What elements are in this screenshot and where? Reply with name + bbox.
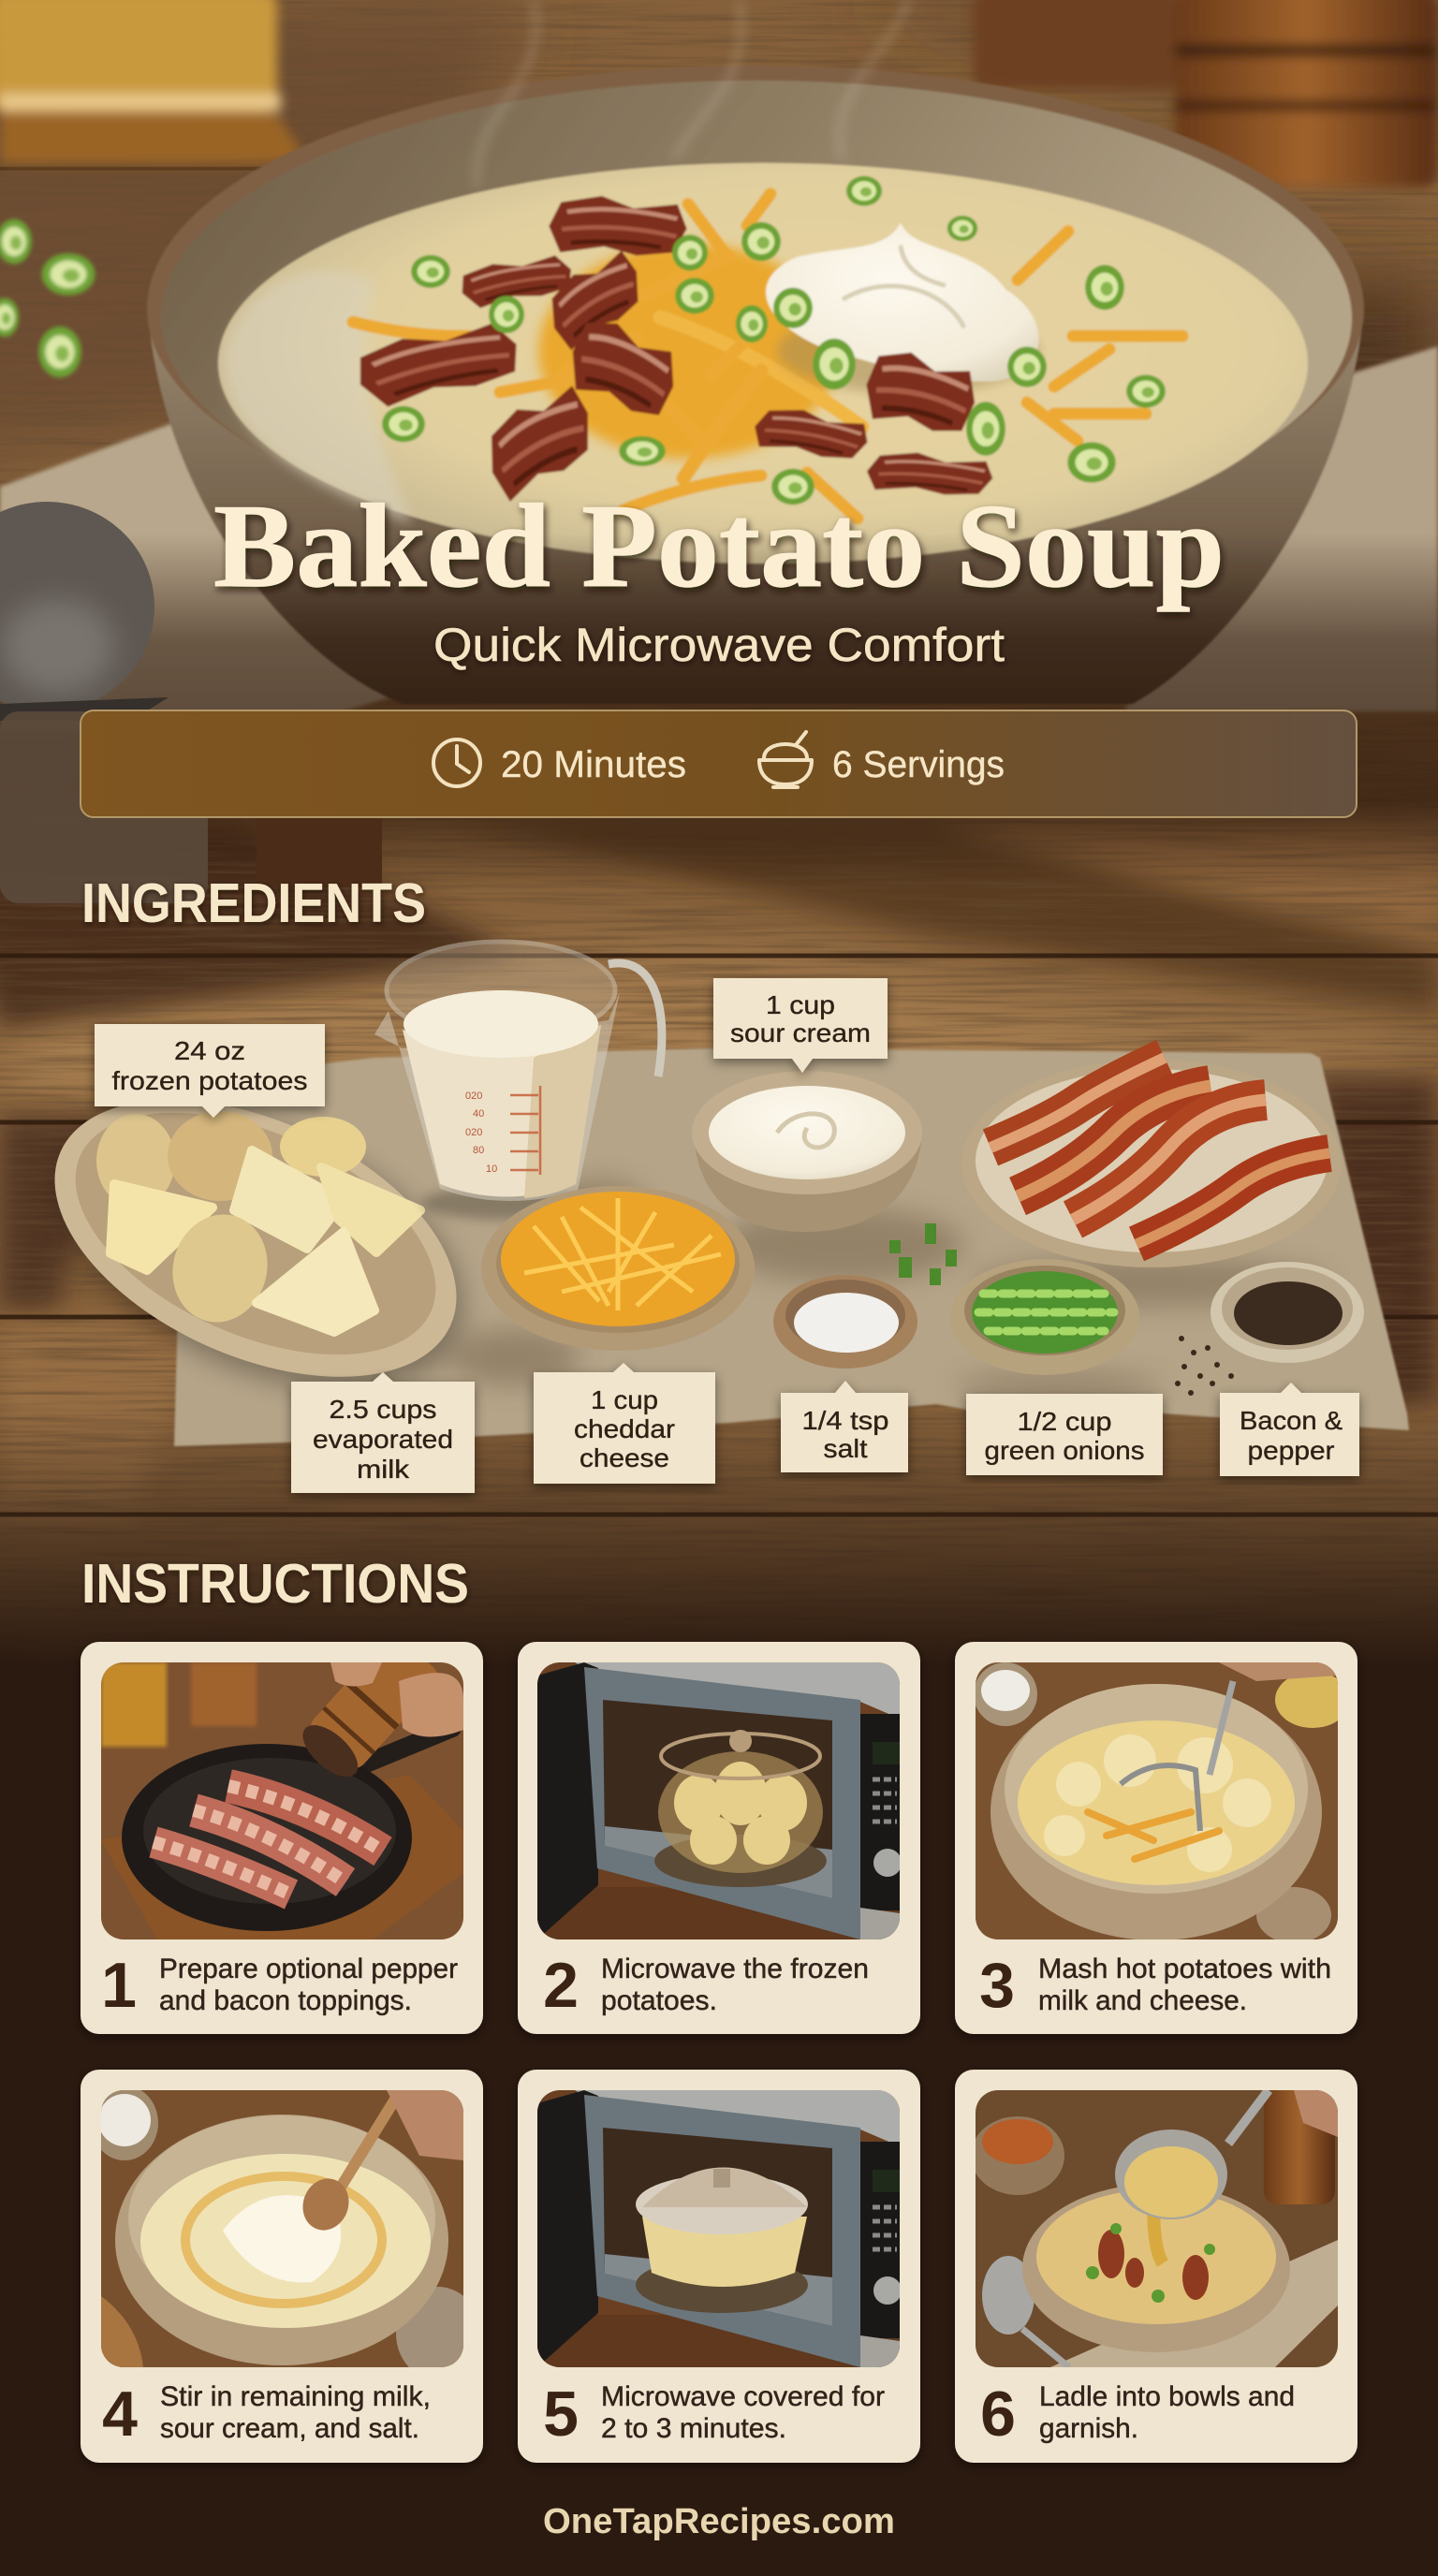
step card 3 xyxy=(955,1642,1357,2034)
step text 4 xyxy=(160,2381,431,2444)
step text 1: Prepare optional pepper xyxy=(159,1954,458,1984)
label: cheddar cheese: 1 cup xyxy=(591,1385,658,1414)
step text 3 xyxy=(1038,1954,1331,2016)
bowl inner wall xyxy=(161,80,1352,556)
ingredient: cheddar plate xyxy=(481,1186,755,1351)
step 6 image: ladling soup xyxy=(971,2090,1338,2367)
label: cheddar cheese xyxy=(534,1363,715,1484)
step text 2 xyxy=(601,1954,869,2016)
step text 5: 2 to 3 minutes. xyxy=(601,2413,786,2444)
label: frozen potatoes: frozen potatoes xyxy=(112,1066,307,1095)
linen cloth xyxy=(174,1048,1409,1446)
hero props: blurred glass and pepper mills xyxy=(0,0,1437,187)
bacon pieces xyxy=(347,191,998,506)
label: evaporated milk: 2.5 cups xyxy=(330,1395,436,1424)
ingredient: bacon plate xyxy=(961,1058,1342,1267)
label: cheddar cheese: cheese xyxy=(580,1443,669,1472)
title: Baked Potato Soup xyxy=(213,479,1225,612)
step text 2: potatoes. xyxy=(601,1985,717,2016)
step number 5: 5 xyxy=(543,2378,579,2450)
label: evaporated milk: milk xyxy=(357,1455,410,1484)
step card 2 xyxy=(518,1642,920,2034)
hero soup bowl xyxy=(147,66,1364,704)
step text 5: Microwave covered for xyxy=(601,2381,885,2412)
bowl rim xyxy=(147,66,1364,552)
label: salt xyxy=(781,1381,908,1472)
step text 2: Microwave the frozen xyxy=(601,1954,869,1984)
cheese mound xyxy=(538,243,838,459)
label: frozen potatoes xyxy=(95,1024,325,1118)
darkening overlay behind title xyxy=(0,534,1438,889)
servings: 6 Servings xyxy=(832,744,1005,785)
step 5 image: covered dish in microwave xyxy=(537,2090,902,2367)
step text 5 xyxy=(601,2381,885,2444)
step number 4: 4 xyxy=(102,2378,138,2450)
ingredient: salt bowl xyxy=(773,1275,917,1368)
label: evaporated milk xyxy=(291,1372,475,1493)
step number 1: 1 xyxy=(101,1950,137,2021)
hero props: linen napkin xyxy=(0,346,1438,730)
soup surface xyxy=(218,163,1308,564)
step number 2: 2 xyxy=(543,1950,579,2021)
ingredient: evaporated milk measuring cup xyxy=(374,942,662,1220)
step text 6 xyxy=(1039,2381,1295,2444)
ingredient: evaporated milk measuring cup: 80 xyxy=(473,1145,484,1156)
sour cream dollop xyxy=(766,223,1039,382)
label: bacon and pepper xyxy=(1220,1383,1359,1476)
cloth shadows xyxy=(449,1179,1329,1398)
background: rustic wood table fading to dark brown xyxy=(0,0,1438,1642)
label: salt: salt xyxy=(824,1434,868,1463)
loose onion pieces and peppercorns xyxy=(889,1223,1234,1396)
step card 1 xyxy=(81,1631,483,2034)
step number 3: 3 xyxy=(979,1950,1015,2021)
step card 5 xyxy=(518,2070,920,2463)
ingredient: evaporated milk measuring cup: 020 xyxy=(465,1127,482,1138)
heading: ingredients: INGREDIENTS xyxy=(81,872,426,934)
label: evaporated milk: evaporated xyxy=(313,1425,453,1454)
step text 1: and bacon toppings. xyxy=(159,1985,412,2016)
spoon and side props xyxy=(0,502,382,903)
icon: clock xyxy=(433,739,480,786)
label: sour cream xyxy=(713,978,888,1073)
label: cheddar cheese: cheddar xyxy=(574,1414,675,1443)
ingredient: sour cream bowl xyxy=(692,1071,922,1232)
table onion pieces xyxy=(0,219,95,377)
step card 4 xyxy=(81,2070,483,2463)
icon: bowl xyxy=(759,732,812,787)
ingredient: green onion bowl xyxy=(950,1259,1139,1375)
step 3 image: mashing potatoes xyxy=(974,1662,1350,1943)
step card 6 xyxy=(955,2070,1357,2463)
ingredient: evaporated milk measuring cup: 10 xyxy=(486,1164,497,1175)
heading: instructions: INSTRUCTIONS xyxy=(81,1553,469,1615)
glossy broth patch xyxy=(225,271,412,524)
footer site name: OneTapRecipes.com xyxy=(543,2502,895,2541)
ingredient: frozen potatoes plate xyxy=(12,1044,506,1446)
step text 4: sour cream, and salt. xyxy=(160,2413,419,2444)
step number 6: 6 xyxy=(980,2378,1016,2450)
ingredient: evaporated milk measuring cup: 40 xyxy=(473,1108,484,1120)
step 1 image: pepper over bacon in skillet xyxy=(101,1631,463,1939)
stats bar xyxy=(81,710,1357,817)
label: green onions xyxy=(966,1394,1163,1475)
steam wisps xyxy=(477,0,908,187)
green onion slices xyxy=(382,176,1166,505)
label: salt: 1/4 tsp xyxy=(801,1406,889,1435)
step text 4: Stir in remaining milk, xyxy=(160,2381,431,2412)
bowl outer body xyxy=(148,309,1364,704)
label: green onions: green onions xyxy=(985,1436,1144,1465)
subtitle: Quick Microwave Comfort xyxy=(433,619,1005,671)
step text 3: milk and cheese. xyxy=(1038,1985,1247,2016)
step text 6: garnish. xyxy=(1039,2413,1138,2444)
ingredient: black pepper bowl xyxy=(1211,1262,1364,1363)
step 4 image: stirring soup xyxy=(91,2086,480,2380)
label: green onions: 1/2 cup xyxy=(1017,1407,1112,1436)
label: sour cream: sour cream xyxy=(730,1018,871,1047)
step 2 image: potatoes in microwave xyxy=(537,1662,902,1939)
step text 1 xyxy=(159,1954,458,2016)
ingredient: evaporated milk measuring cup: 020 xyxy=(465,1090,482,1102)
label: frozen potatoes: 24 oz xyxy=(174,1036,245,1065)
step text 3: Mash hot potatoes with xyxy=(1038,1954,1331,1984)
label: bacon and pepper: Bacon & xyxy=(1240,1406,1343,1435)
label: sour cream: 1 cup xyxy=(766,990,835,1019)
shredded cheddar xyxy=(353,194,1182,519)
sour cream shadow xyxy=(777,309,1039,393)
step text 6: Ladle into bowls and xyxy=(1039,2381,1295,2412)
cook time: 20 Minutes xyxy=(501,744,686,785)
label: bacon and pepper: pepper xyxy=(1247,1436,1335,1465)
